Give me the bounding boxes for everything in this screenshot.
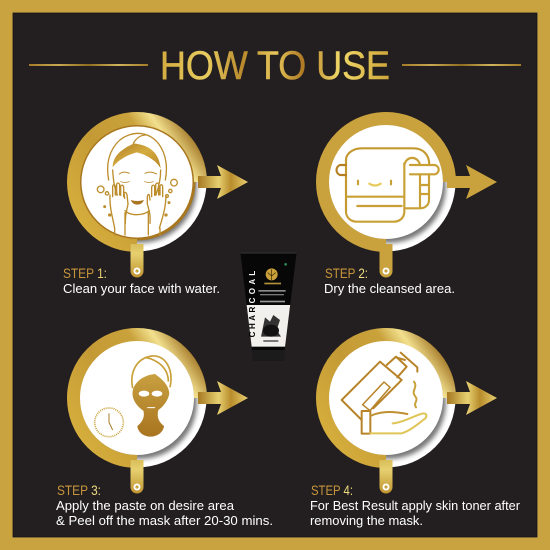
step 1 text: Clean your face with water. — [63, 281, 220, 296]
step 1 text: STEP 1: — [63, 265, 107, 281]
step 2 badge — [316, 112, 497, 278]
icon: face mask with clock — [95, 356, 171, 437]
step 2 text: STEP 2: — [325, 265, 368, 281]
title rule right — [402, 64, 521, 66]
step 1 badge — [68, 112, 248, 278]
step 4 text: STEP 4: — [311, 482, 353, 498]
step 3 text: STEP 3: — [57, 482, 101, 498]
icon: towel — [337, 148, 439, 222]
product tube — [240, 252, 296, 361]
step 2 text: Dry the cleansed area. — [324, 281, 455, 296]
product tube: COAL — [248, 271, 257, 303]
step 4 badge — [316, 328, 497, 494]
step 3 text: & Peel off the mask after 20-30 mins. — [56, 513, 273, 528]
step 1 text — [63, 265, 220, 296]
step 3 badge — [68, 328, 248, 494]
icon: face washing — [97, 133, 177, 235]
step 2 text — [324, 265, 455, 296]
step 3 text: Apply the paste on desire area — [56, 498, 235, 513]
title: HOW TO USE — [160, 44, 390, 88]
icon: bottle pouring on hand — [342, 353, 426, 434]
step 3 text — [56, 482, 273, 528]
step 4 text — [310, 482, 521, 528]
step 4 text: removing the mask. — [310, 513, 423, 528]
step 4 text: For Best Result apply skin toner after — [310, 498, 521, 513]
title rule left — [29, 64, 148, 66]
product tube: CHAR — [248, 306, 257, 337]
